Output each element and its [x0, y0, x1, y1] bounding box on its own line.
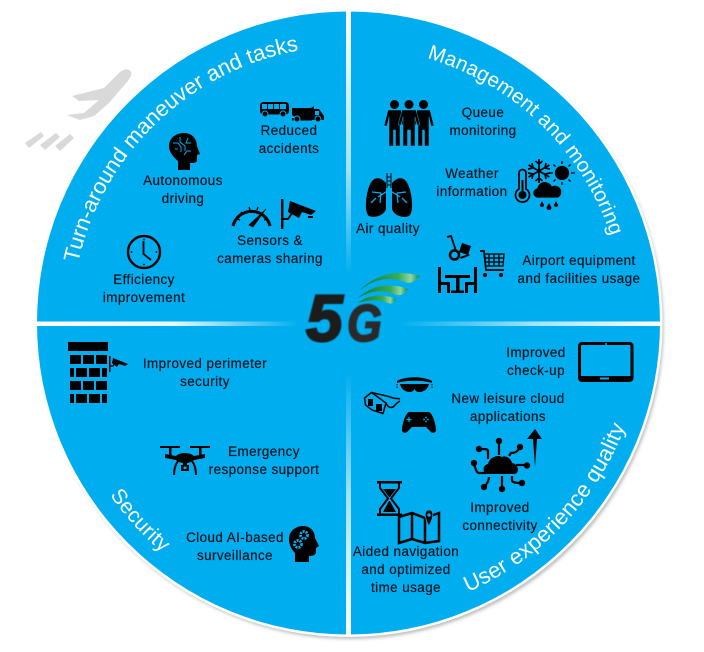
icon: up arrow — [527, 429, 542, 467]
icon: game controller — [402, 412, 436, 433]
text: New leisure cloud applications: New leisure cloud — [451, 391, 565, 406]
icon: head with gears — [289, 526, 319, 562]
icon: hand truck with box — [447, 236, 471, 260]
icon: truck — [292, 106, 324, 122]
icon: small surveillance camera — [109, 356, 128, 372]
icon: drone — [160, 446, 210, 475]
icon: tablet — [579, 343, 633, 381]
icon: map with pin — [399, 510, 439, 543]
text: Queue monitoring: Queue — [462, 105, 504, 120]
text: Efficiency improvement: improvement — [103, 290, 185, 305]
icon: sun — [550, 161, 575, 185]
text: Cloud AI-based surveillance: surveillance — [197, 548, 273, 563]
text: Improved connectivity: Improved — [470, 500, 530, 515]
text: Aided navigation and optimized time usage: Aided navigation — [353, 544, 459, 559]
icon: surveillance camera — [281, 199, 316, 229]
icon: lungs — [366, 173, 412, 217]
heading: User experience quality: User experience quality — [463, 422, 626, 590]
icon: people queue — [384, 100, 434, 146]
icon: thermometer — [516, 170, 530, 202]
icon: clock — [128, 236, 160, 268]
text: Cloud AI-based surveillance: Cloud AI-based — [186, 530, 284, 545]
text: Improved connectivity: connectivity — [462, 518, 538, 533]
icon: table and chairs — [438, 267, 477, 293]
text: Airport equipment and facilities usage: and facilities usage — [518, 271, 640, 286]
text: Queue monitoring: monitoring — [449, 123, 517, 138]
text: Autonomous driving: Autonomous — [143, 173, 223, 188]
icon: VR headset — [397, 377, 432, 392]
text: Improved check-up: check-up — [507, 363, 565, 378]
heading: Security: Security — [112, 489, 170, 551]
text: Reduced accidents: accidents — [259, 141, 319, 156]
icon: connected cloud — [471, 438, 530, 492]
logo: 5G: G — [347, 295, 382, 353]
logo: 5G: 5 — [306, 281, 344, 355]
icon: bus — [260, 102, 289, 117]
icon: rain cloud — [533, 182, 562, 210]
horizontal divider — [36, 322, 661, 326]
heading: Turn-around maneuver and tasks: Turn-around maneuver and tasks — [63, 38, 298, 260]
text: Autonomous driving: driving — [162, 191, 204, 206]
text: Aided navigation and optimized time usage: and optimized — [361, 562, 451, 577]
icon: speed gauge — [233, 207, 270, 227]
text: Emergency response support: response support — [209, 462, 319, 477]
text: Sensors & cameras sharing: cameras sharing — [217, 251, 323, 266]
icon: 3D glasses — [364, 392, 400, 414]
text: Efficiency improvement: Efficiency — [113, 272, 175, 287]
text: Improved check-up: Improved — [506, 345, 566, 360]
icon: head with circuit brain — [169, 133, 200, 170]
icon: airplane — [25, 69, 131, 151]
logo: 5G — [306, 273, 420, 355]
icon: hourglass — [377, 481, 402, 516]
icon: brick wall — [68, 342, 108, 403]
text: Air quality: Air quality — [356, 221, 420, 236]
text: Aided navigation and optimized time usage: time usage — [371, 580, 441, 595]
text: Sensors & cameras sharing: Sensors & — [237, 233, 303, 248]
vertical divider — [346, 11, 351, 635]
text: Airport equipment and facilities usage: Airport equipment — [522, 253, 636, 268]
text: Weather information: information — [436, 184, 508, 199]
text: Improved perimeter security: Improved perimeter — [143, 356, 267, 371]
icon: shopping cart — [480, 251, 504, 277]
text: Weather information: Weather — [445, 166, 499, 181]
text: Emergency response support: Emergency — [228, 444, 300, 459]
icon: snowflake — [528, 159, 550, 183]
heading: Management and monitoring: Management and monitoring — [428, 45, 621, 235]
logo swooshes — [358, 273, 420, 304]
text: Improved perimeter security: security — [180, 374, 230, 389]
text: Reduced accidents: Reduced — [261, 123, 317, 138]
text: New leisure cloud applications: applications — [470, 409, 546, 424]
